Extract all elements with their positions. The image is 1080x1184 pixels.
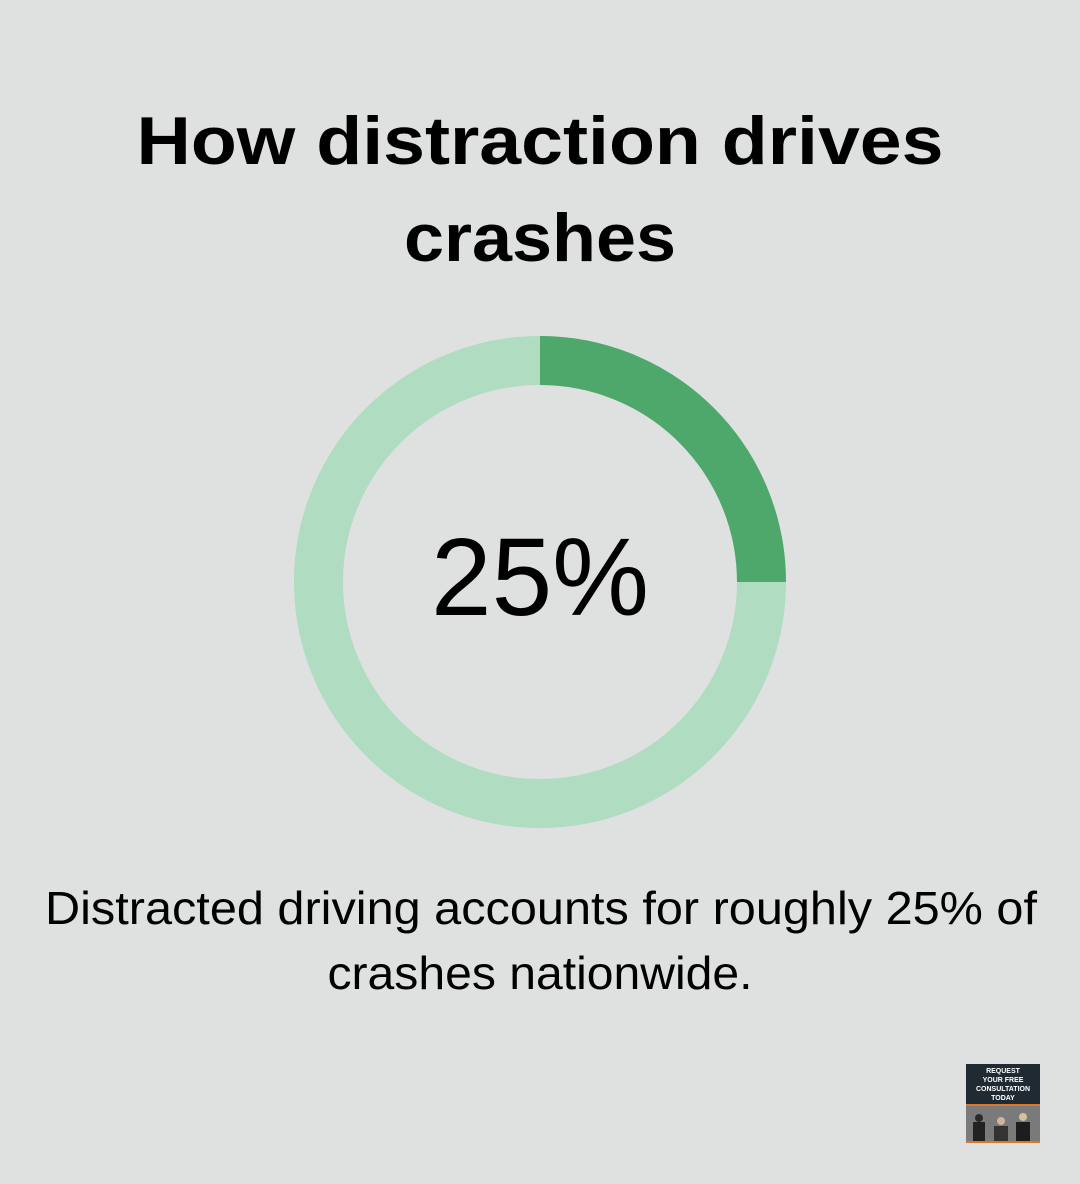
logo: consultation badge: [966, 1064, 1040, 1143]
description text: Distracted driving accounts for roughly 25% of: [45, 882, 1037, 934]
description text: [45, 882, 1037, 999]
donut chart: [318, 360, 762, 804]
title: [136, 103, 944, 276]
logo: consultation badge: REQUEST: [986, 1068, 1021, 1075]
logo: consultation badge: YOUR FREE: [983, 1077, 1024, 1084]
title: How distraction drives: [136, 103, 944, 179]
center value: 25%: [431, 516, 649, 639]
logo: consultation badge: TODAY: [991, 1095, 1015, 1102]
title: crashes: [404, 200, 676, 276]
description text: crashes nationwide.: [328, 947, 752, 999]
logo: consultation badge: CONSULTATION: [976, 1086, 1030, 1093]
